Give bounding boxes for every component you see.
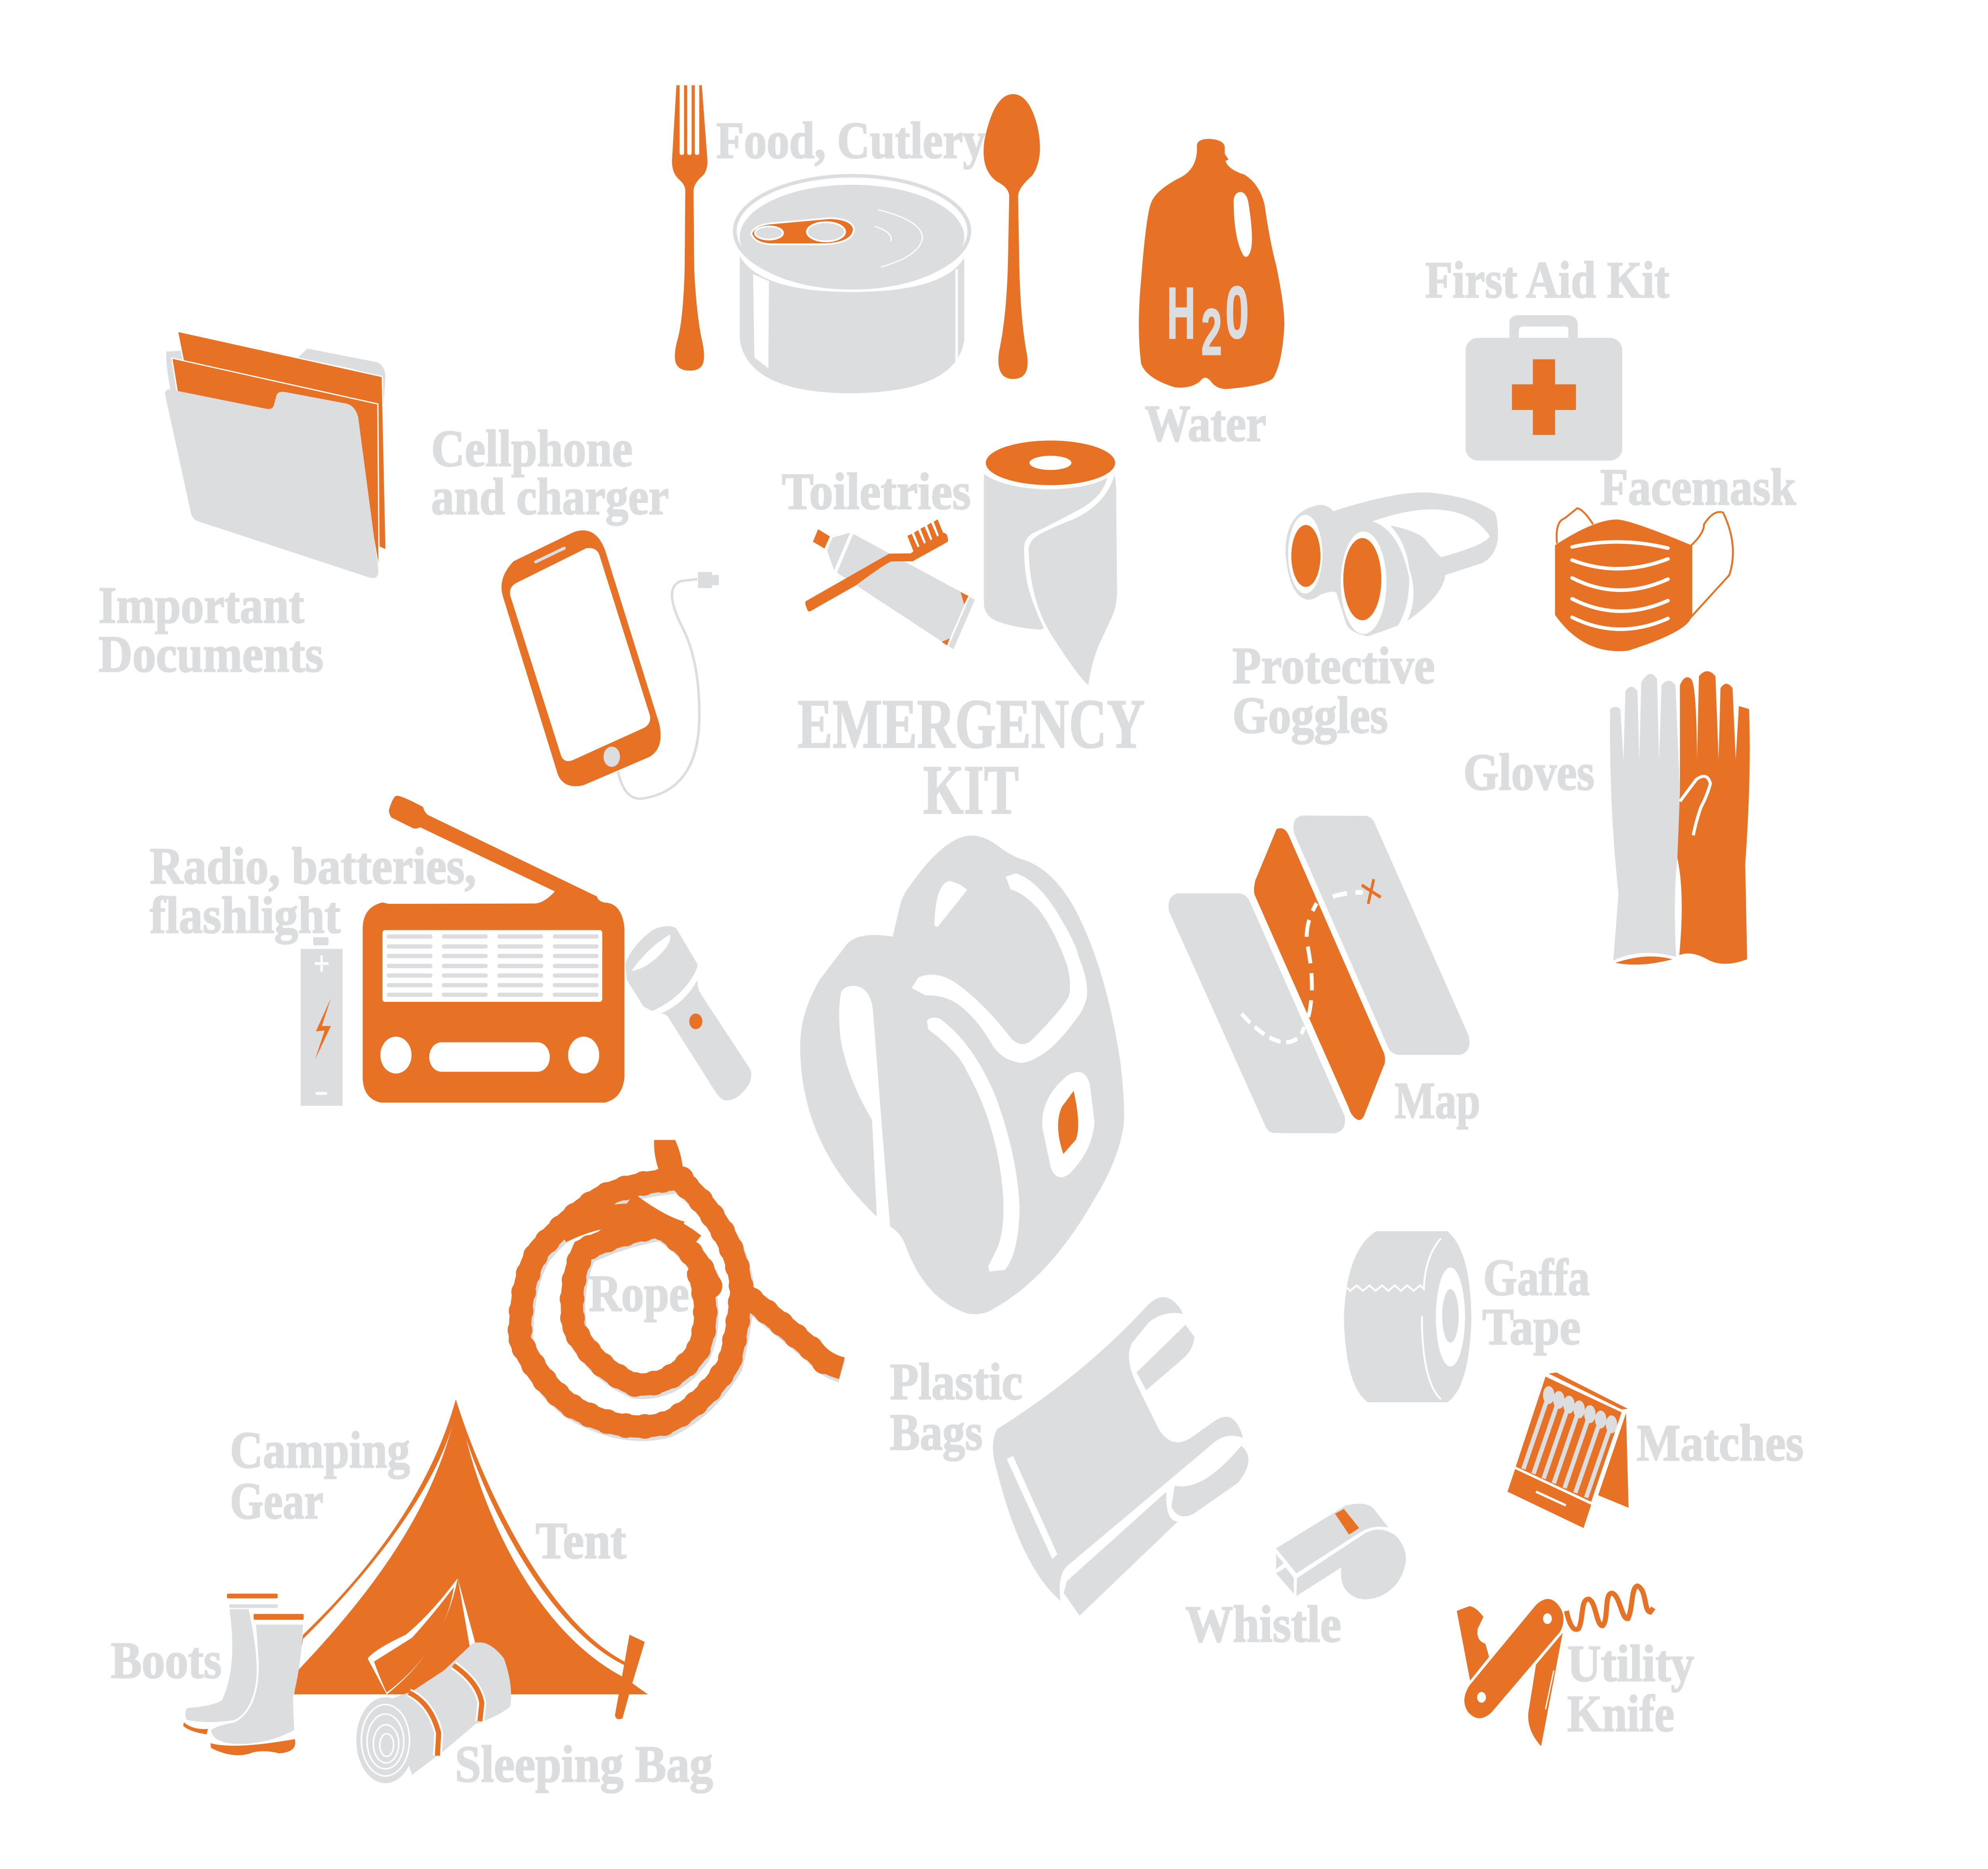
label: protective goggles (1233, 637, 1435, 744)
icon: gloves (1610, 671, 1750, 965)
icon: backpack (800, 835, 1124, 1314)
icon: utility knife (1457, 1586, 1653, 1746)
icon: water jug: H (1167, 273, 1196, 354)
title (798, 685, 1145, 829)
label: toiletries: Toiletries (782, 463, 971, 520)
label: radio, batteries, flashlight: flashlight (150, 887, 340, 944)
label: map: Map (1395, 1072, 1480, 1130)
label: matches: Matches (1637, 1414, 1804, 1472)
icon: flashlight (625, 926, 751, 1100)
label: food, cutlery: Food, Cutlery (716, 112, 986, 169)
label: gaffa tape: Tape (1482, 1298, 1581, 1356)
label: cellphone and charger: and charger (431, 468, 669, 526)
icon: toilet roll (984, 441, 1117, 685)
label: camping gear: Camping (230, 1421, 410, 1479)
label: boots: Boots (111, 1632, 221, 1689)
label: radio, batteries, flashlight (150, 837, 476, 944)
label: rope: Rope (589, 1265, 689, 1322)
icon: gaffa tape (1344, 1231, 1472, 1402)
icon: toothpaste and toothbrush (805, 519, 975, 649)
icon: food can (735, 176, 969, 393)
icon: water jug (1139, 139, 1284, 389)
icon: first aid kit (1466, 315, 1622, 460)
icon: sleeping bag (356, 1642, 511, 1783)
icon: cellphone and charger (501, 530, 719, 799)
label: important documents (98, 576, 323, 683)
label: facemask: Facemask (1600, 458, 1796, 516)
label: utility knife: Utility (1567, 1635, 1694, 1692)
title: KIT (923, 751, 1019, 829)
label: gaffa tape: Gaffa (1483, 1249, 1590, 1306)
icon: spoon (984, 94, 1040, 379)
title: EMERGENCY (798, 685, 1145, 763)
label: protective goggles: Goggles (1233, 687, 1388, 744)
icon: whistle (1276, 1504, 1406, 1599)
icon: fork (672, 83, 707, 371)
label: camping gear (230, 1421, 410, 1530)
icon: documents folder (165, 331, 386, 578)
icon: protective goggles (1285, 493, 1498, 637)
label: sleeping bag: Sleeping Bag (455, 1735, 713, 1793)
label: important documents: Important (98, 576, 304, 634)
label: utility knife (1567, 1635, 1694, 1743)
icon: plastic bag (993, 1297, 1248, 1616)
label: cellphone and charger (431, 420, 669, 526)
label: gloves: Gloves (1464, 743, 1594, 801)
label: plastic bags (890, 1353, 1023, 1461)
icon: radio (363, 796, 625, 1102)
label: radio, batteries, flashlight: Radio, batteries, (150, 837, 476, 895)
label: gaffa tape (1482, 1249, 1590, 1356)
icon: rope (520, 1140, 842, 1430)
label: whistle: Whistle (1185, 1595, 1341, 1653)
label: important documents: Documents (98, 625, 323, 683)
icon: map (1169, 815, 1470, 1133)
label: tent: Tent (536, 1512, 626, 1570)
label: camping gear: Gear (230, 1472, 323, 1530)
label: plastic bags: Plastic (890, 1353, 1023, 1411)
icon: matches (1507, 1372, 1629, 1528)
icon: facemask (1555, 508, 1733, 651)
label: plastic bags: Bags (890, 1403, 982, 1461)
label: first aid kit: First Aid Kit (1425, 251, 1669, 309)
label: water: Water (1145, 395, 1266, 452)
label: cellphone and charger: Cellphone (431, 420, 633, 477)
label: protective goggles: Protective (1233, 637, 1435, 695)
icon: water jug: 2 (1201, 296, 1222, 369)
icon: tent (294, 1399, 648, 1719)
icon: water jug: 0 (1225, 272, 1249, 354)
icon: battery (301, 937, 343, 1106)
icon: boots (183, 1593, 304, 1755)
label: utility knife: Knife (1567, 1685, 1674, 1743)
